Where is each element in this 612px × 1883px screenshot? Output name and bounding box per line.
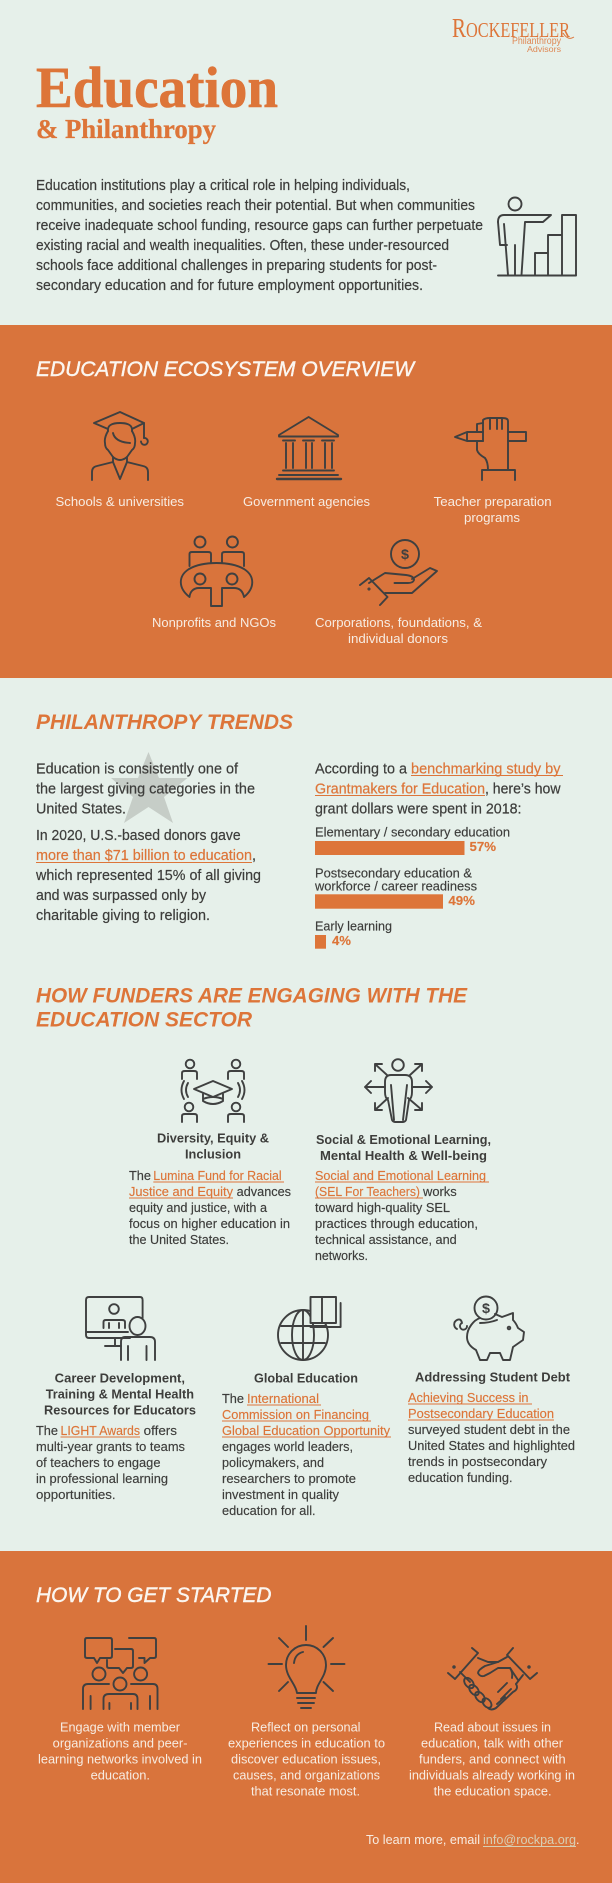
label: corporations, foundations and individual donors: Corporations, foundations, & — [315, 616, 483, 630]
heading: career development: Career Development, — [55, 1371, 185, 1386]
text block: benchmarking study: , here’s how — [485, 782, 561, 798]
text block: International Commission: engages world leaders, — [222, 1440, 353, 1454]
label: teacher preparation programs: Teacher preparation — [434, 495, 552, 509]
text block: International Commission: Global Education Opportunity — [222, 1424, 391, 1438]
title: Education — [36, 55, 278, 120]
bar: early learning 4%: Early learning — [315, 920, 392, 934]
label: corporations, foundations and individual donors — [315, 616, 483, 646]
panel: career development — [36, 1297, 196, 1502]
icon: people with speech bubbles — [83, 1638, 158, 1709]
text block: read about issues: individuals already working in — [409, 1769, 575, 1783]
heading: how funders are engaging — [36, 985, 468, 1032]
label: teacher preparation programs: programs — [464, 511, 520, 525]
text block: read about issues: funders, and connect with — [419, 1753, 566, 1767]
bar: postsecondary education 49%: workforce / career readiness — [314, 880, 477, 894]
bar: elementary / secondary education 57%: 57% — [470, 840, 496, 854]
text block: engage with organizations: Engage with member — [60, 1721, 180, 1735]
text block: International Commission: Commission on Financing — [222, 1408, 369, 1422]
text block: read about issues — [409, 1721, 575, 1799]
text block: LIGHT Awards: multi-year grants to teams — [36, 1440, 185, 1454]
text block: giving categories: and was surpassed only by — [36, 888, 207, 904]
text block: SEL for Teachers: technical assistance, and — [315, 1233, 457, 1247]
text block: International Commission: researchers to promote — [222, 1472, 356, 1486]
text block: International Commission: education for all. — [222, 1504, 316, 1518]
heading: philanthropy trends: PHILANTHROPY TRENDS — [36, 711, 293, 734]
panel: global education — [222, 1297, 391, 1518]
label: corporations, foundations and individual donors: individual donors — [348, 632, 448, 646]
heading: education ecosystem overview: EDUCATION ECOSYSTEM OVERVIEW — [36, 358, 416, 381]
text block: giving categories: , — [252, 848, 256, 864]
panel: addressing student debt — [408, 1296, 575, 1485]
bar: early learning 4% — [315, 920, 392, 949]
title: & Philanthropy — [36, 114, 216, 144]
logo: Rockefeller Philanthropy Advisors: ROCKEFELLER — [452, 13, 570, 43]
text block: benchmarking study: Grantmakers for Education — [315, 782, 485, 798]
label: government agencies: Government agencies — [243, 495, 370, 509]
text block: SEL for Teachers: works — [422, 1185, 457, 1199]
text block: LIGHT Awards: in professional learning — [36, 1472, 168, 1486]
panel: social and emotional learning — [315, 1059, 491, 1263]
intro text block: existing racial and wealth inequalities. Often, these under-resourced — [36, 238, 449, 254]
text block: achieving success: education funding. — [408, 1471, 512, 1485]
text block: achieving success: Achieving Success in — [408, 1391, 529, 1405]
text block: Lumina Fund — [129, 1169, 291, 1247]
heading: global education: Global Education — [254, 1371, 358, 1386]
footer: learn more email: . — [576, 1833, 579, 1847]
bar chart: grant dollars 2018 — [314, 826, 510, 949]
intro text block: receive inadequate school funding, resource gaps can further perpetuate — [36, 218, 483, 234]
text block: benchmarking study: grant dollars were spent in 2018: — [315, 802, 522, 818]
text block: LIGHT Awards: offers — [144, 1424, 177, 1438]
icon: light bulb — [268, 1626, 344, 1708]
icon: hand with coin — [360, 540, 437, 605]
icon: globe with book — [278, 1297, 341, 1360]
logo: Rockefeller Philanthropy Advisors: Advisors — [527, 44, 561, 54]
text block: reflect on experiences: discover education issues, — [231, 1753, 381, 1767]
icon: handshake — [448, 1648, 537, 1710]
panel: education ecosystem overview — [0, 325, 612, 678]
panel: how to get started — [0, 1551, 612, 1883]
text block: achieving success — [408, 1391, 575, 1485]
text block: SEL for Teachers: networks. — [315, 1249, 368, 1263]
text block: SEL for Teachers: practices through education, — [315, 1217, 478, 1231]
logo: Rockefeller Philanthropy Advisors: Philanthropy — [512, 36, 561, 47]
text block: SEL for Teachers: Social and Emotional Learning — [315, 1169, 486, 1183]
text block: International Commission: International — [247, 1392, 319, 1406]
text block: benchmarking study — [315, 762, 563, 818]
text block: giving categories: the largest giving categories in the — [36, 782, 255, 798]
intro text block — [36, 178, 483, 294]
heading: career development: Training & Mental Health — [46, 1387, 194, 1402]
heading: diversity, equity and inclusion: Inclusion — [185, 1147, 241, 1162]
intro text block: Education institutions play a critical role in helping individuals, — [36, 178, 410, 194]
text block: read about issues: education, talk with other — [421, 1737, 563, 1751]
text block: giving categories: Education is consistently one of — [36, 762, 239, 778]
text block: reflect on experiences: Reflect on personal — [251, 1721, 360, 1735]
text block: engage with organizations: education. — [91, 1769, 150, 1783]
text block: achieving success: United States and highlighted — [408, 1439, 575, 1453]
label: nonprofits and NGOs: Nonprofits and NGOs — [152, 616, 276, 630]
heading: social and emotional learning: Social & Emotional Learning, — [316, 1132, 491, 1147]
text block: read about issues: Read about issues in — [434, 1721, 551, 1735]
heading: how funders are engaging: EDUCATION SECTOR — [36, 1009, 253, 1032]
label: teacher preparation programs — [434, 495, 552, 525]
text block: achieving success: trends in postsecondary — [408, 1455, 548, 1469]
bar: elementary / secondary education 57%: Elementary / secondary education — [315, 826, 510, 840]
heading: social and emotional learning: Mental Health & Well-being — [320, 1148, 487, 1163]
icon: hand with coin: $ — [401, 546, 409, 562]
heading: how funders are engaging: HOW FUNDERS ARE ENGAGING WITH THE — [36, 985, 468, 1008]
intro text block: schools face additional challenges in preparing students for post- — [36, 258, 437, 274]
heading: career development — [44, 1371, 196, 1418]
bar: postsecondary education 49% — [314, 867, 477, 909]
icon: monitor with teacher — [86, 1297, 155, 1360]
text block: giving categories: which represented 15% of all giving — [35, 868, 261, 884]
icon: piggy bank: $ — [482, 1300, 490, 1316]
text block: LIGHT Awards: of teachers to engage — [36, 1456, 161, 1470]
intro text block: communities, and societies reach their potential. But when communities — [36, 198, 475, 214]
text block: engage with organizations: organizations and peer- — [53, 1737, 188, 1751]
heading: diversity, equity and inclusion — [157, 1131, 269, 1162]
text block: Lumina Fund: the United States. — [129, 1233, 229, 1247]
text block: achieving success: Postsecondary Education — [408, 1407, 554, 1421]
icon: piggy bank — [454, 1296, 524, 1360]
text block: read about issues: the education space. — [434, 1785, 552, 1799]
bar: postsecondary education 49%: 49% — [448, 894, 475, 908]
text block: SEL for Teachers — [315, 1169, 489, 1263]
text block: benchmarking study: According to a — [315, 762, 408, 778]
text block: Lumina Fund: focus on higher education in — [129, 1217, 290, 1231]
intro text block: secondary education and for future employment opportunities. — [36, 278, 423, 294]
bar: elementary / secondary education 57% — [315, 826, 510, 855]
footer: learn more email: To learn more, email — [366, 1833, 480, 1847]
heading: addressing student debt: Addressing Student Debt — [415, 1370, 571, 1385]
text block: LIGHT Awards: The — [36, 1424, 58, 1438]
text block: giving categories: charitable giving to religion. — [36, 908, 210, 924]
text block: International Commission — [222, 1392, 391, 1518]
text block: Lumina Fund: Justice and Equity — [129, 1185, 234, 1199]
text block: SEL for Teachers: toward high-quality SEL — [315, 1201, 450, 1215]
footer: learn more email: info@rockpa.org — [483, 1833, 576, 1847]
logo: Rockefeller Philanthropy Advisors — [452, 13, 574, 54]
label: schools and universities: Schools & universities — [56, 495, 184, 509]
text block: reflect on experiences: causes, and organizations — [233, 1769, 380, 1783]
footer: learn more email — [366, 1833, 579, 1847]
text block: Lumina Fund: The — [129, 1169, 151, 1183]
text block: International Commission: The — [222, 1392, 244, 1406]
icon: people around graduation cap — [182, 1060, 244, 1122]
bar: postsecondary education 49%: Postsecondary education & — [315, 867, 473, 881]
text block: benchmarking study: benchmarking study by — [411, 762, 561, 778]
text block: giving categories — [35, 762, 261, 924]
text block: reflect on experiences — [228, 1721, 385, 1799]
text block: engage with organizations — [38, 1721, 202, 1783]
text block: giving categories: In 2020, U.S.-based donors gave — [36, 828, 241, 844]
heading: diversity, equity and inclusion: Diversity, Equity & — [157, 1131, 269, 1146]
text block: reflect on experiences: experiences in education to — [228, 1737, 385, 1751]
text block: engage with organizations: learning networks involved in — [38, 1753, 202, 1767]
bar: early learning 4%: 4% — [332, 934, 351, 948]
icon: person presenting bar chart — [498, 198, 576, 276]
text block: LIGHT Awards — [36, 1424, 185, 1502]
heading: how to get started: HOW TO GET STARTED — [36, 1584, 272, 1607]
icon: hand holding pencil — [455, 418, 526, 480]
text block: International Commission: policymakers, and — [222, 1456, 324, 1470]
text block: Lumina Fund: Lumina Fund for Racial — [153, 1169, 282, 1183]
heading: social and emotional learning — [316, 1132, 491, 1163]
text block: reflect on experiences: that resonate most. — [251, 1785, 360, 1799]
text block: Lumina Fund: advances — [237, 1185, 291, 1199]
text block: LIGHT Awards: opportunities. — [36, 1488, 116, 1502]
panel: diversity, equity and inclusion — [129, 1060, 291, 1247]
text block: LIGHT Awards: LIGHT Awards — [60, 1424, 140, 1438]
text block: giving categories: United States. — [36, 802, 126, 818]
text block: achieving success: surveyed student debt in the — [408, 1423, 570, 1437]
text block: Lumina Fund: equity and justice, with a — [129, 1201, 267, 1215]
text block: International Commission: investment in quality — [222, 1488, 340, 1502]
icon: grey star — [111, 752, 188, 823]
text block: giving categories: more than $71 billion to education — [36, 848, 252, 864]
icon: people around table — [181, 536, 252, 606]
icon: government building — [277, 417, 341, 479]
text block: SEL for Teachers: (SEL For Teachers) — [315, 1185, 420, 1199]
heading: career development: Resources for Educators — [44, 1403, 196, 1418]
icon: graduate — [92, 412, 148, 480]
icon: person with arrows — [365, 1059, 432, 1122]
